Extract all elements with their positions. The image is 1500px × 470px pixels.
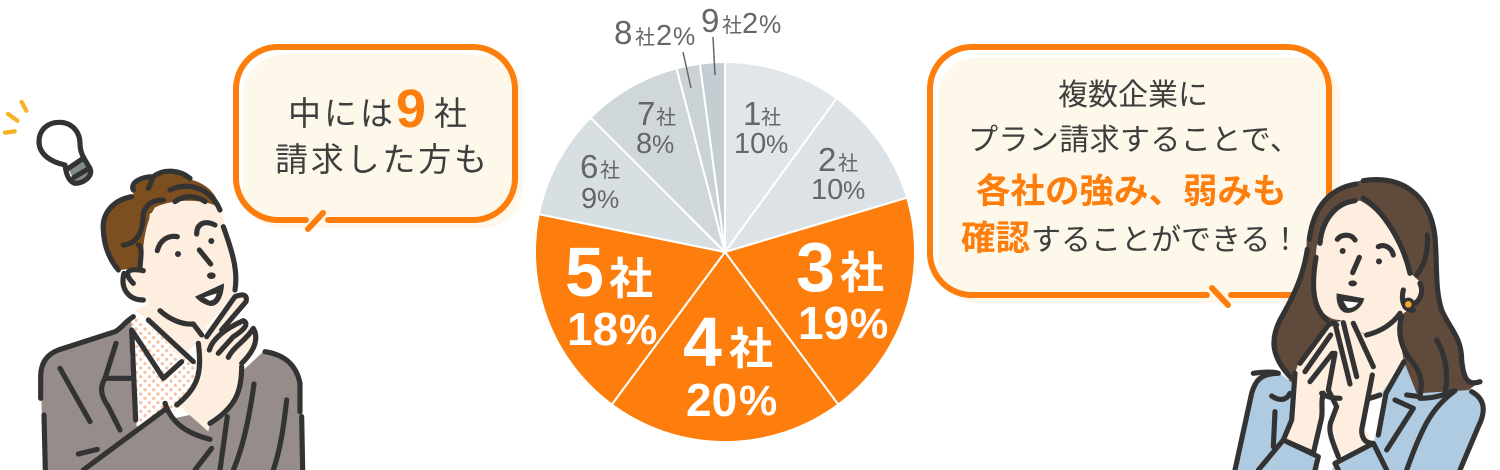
label: 4社 20%: 4: [683, 303, 722, 381]
label: 8社 2%: %: [673, 23, 695, 51]
line art: man: [41, 171, 303, 470]
label: 8社 2%: 8: [614, 14, 632, 51]
label: 7社 8%: 7: [637, 95, 655, 132]
label: 6社 9%: %: [597, 186, 619, 214]
eyes, nose and mouth: [1337, 235, 1393, 313]
hand: [178, 294, 258, 432]
label: 1社 10%: 10: [734, 128, 766, 160]
icon: light bulb: [5, 102, 91, 183]
bubble text: right: 各社の強み、弱みも: [976, 173, 1286, 211]
label: 7社 8%: %: [652, 131, 674, 159]
label: 3社 19%: 3: [796, 228, 835, 306]
hands: [1283, 320, 1375, 457]
shirt: [130, 313, 197, 425]
label: 2社 10%: %: [843, 177, 865, 205]
slice: 8社 2%: [676, 64, 725, 252]
label: 9社 2%: 9: [701, 2, 719, 39]
slice: 2社 10%: [725, 98, 907, 252]
bubble text: right: 複数企業に: [1058, 79, 1208, 112]
bubble text: left: に: [324, 95, 357, 132]
label: 5社 18%: 社: [609, 255, 653, 304]
bubble text: right: することができる！: [1031, 224, 1300, 257]
slice: 6社 9%: [539, 118, 725, 252]
illustration: woman clasping hands: [1233, 178, 1483, 470]
label: 9社 2%: 2: [742, 8, 758, 40]
label: 9社 2%: 社: [722, 14, 742, 37]
hair: [102, 171, 220, 270]
label: 1社 10%: %: [766, 131, 788, 159]
sleeve: [83, 408, 212, 470]
speech bubble: right: [930, 47, 1340, 305]
bubble text: left: 中: [288, 95, 321, 132]
bubble text: left: は: [360, 95, 393, 132]
label: 4社 20%: 20: [686, 374, 737, 426]
slice: 7社 8%: [591, 68, 725, 252]
neck: [135, 300, 207, 358]
label: 6社 9%: 9: [581, 183, 597, 215]
earring: [1402, 298, 1415, 311]
label: 7社 8%: 社: [656, 106, 676, 129]
label: 1社 10%: 1: [743, 95, 761, 132]
label: 2社 10%: 10: [811, 174, 843, 206]
neck: [1322, 317, 1404, 399]
label: 2社 10%: 2: [818, 141, 836, 178]
label: 5社 18%: 5: [565, 233, 604, 311]
bubble text: right: 確認: [961, 220, 1030, 258]
hair: [1273, 178, 1477, 403]
label: 1社 10%: 社: [761, 106, 781, 129]
label: 8社 2%: 2: [656, 20, 672, 52]
slice: 3社 19%: [725, 198, 915, 405]
label: 6社 9%: 6: [580, 148, 598, 185]
slice: 4社 20%: [612, 252, 838, 442]
label: 9社 2%: %: [759, 11, 781, 39]
eyes and mouth: [175, 238, 224, 306]
illustration: man with light bulb: [5, 102, 304, 470]
label: 5社 18%: 18: [567, 303, 618, 355]
face: [1313, 201, 1422, 335]
label: 2社 10%: 社: [838, 152, 858, 175]
label: 7社 8%: 8: [636, 128, 652, 160]
pie chart: [535, 2, 915, 442]
label: 4社 20%: 社: [729, 325, 773, 374]
label: 3社 19%: 19: [798, 297, 849, 349]
label: 4社 20%: %: [739, 377, 777, 425]
slice: 1社 10%: [725, 62, 837, 252]
label: 5社 18%: %: [619, 306, 657, 354]
bubble text: right: プラン請求することで、: [968, 124, 1300, 157]
bubble text: left: 請求した方も: [275, 141, 490, 178]
bubble text: left: 9: [396, 79, 426, 139]
speech bubble: left: [236, 47, 523, 229]
label: 6社 9%: 社: [600, 159, 620, 182]
line art: woman: [1235, 180, 1483, 470]
jacket: [41, 317, 304, 470]
slice: 5社 18%: [535, 214, 725, 405]
label: 3社 19%: %: [850, 300, 888, 348]
shirt: [1318, 393, 1387, 470]
leader line: 9社: [713, 37, 715, 75]
jacket: [1233, 360, 1483, 470]
slice: 9社 2%: [700, 62, 725, 252]
face: [123, 201, 235, 327]
label: 8社 2%: 社: [635, 26, 655, 49]
label: 3社 19%: 社: [840, 249, 884, 298]
leader line: 8社: [683, 52, 691, 88]
bubble text: left: 社: [434, 95, 467, 132]
